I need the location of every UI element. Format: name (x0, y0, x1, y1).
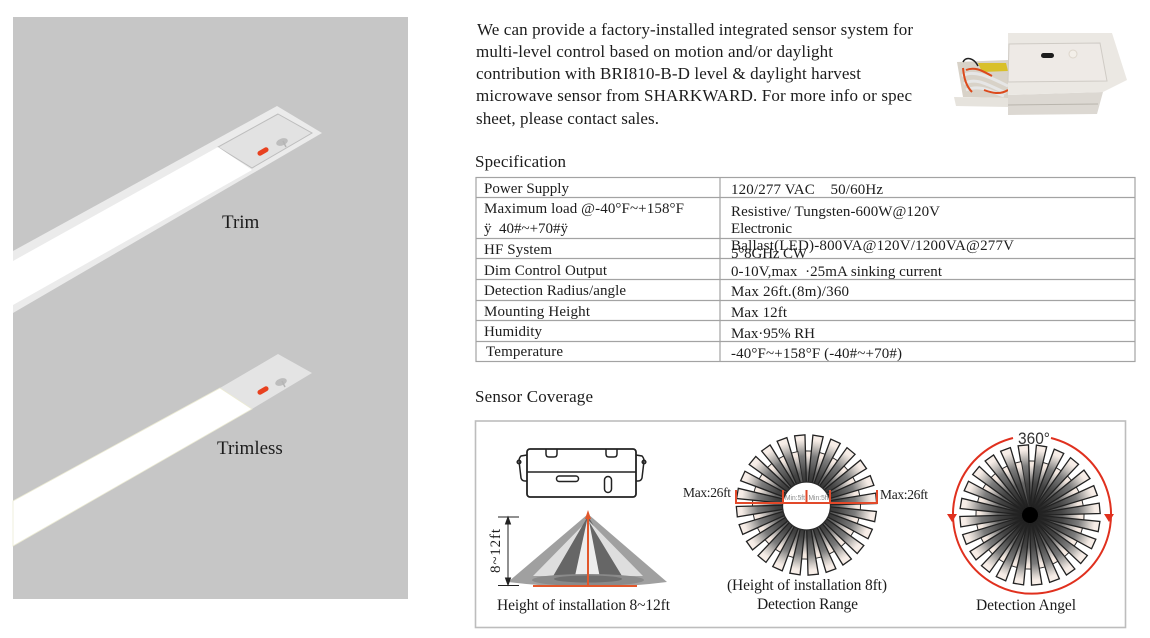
sensor product photo (954, 33, 1127, 115)
table values column: Electronic (731, 221, 792, 237)
chart: side cone coverage (488, 510, 667, 587)
intro paragraph: sheet, please contact sales. (476, 109, 659, 128)
caption: detection angel: Detection Angel (976, 597, 1076, 614)
table values column: Resistive/ Tungsten-600W@120V (731, 204, 940, 220)
table values column (731, 182, 1014, 362)
chart: detection angle fan (947, 429, 1114, 594)
height label: 8~12ft (488, 528, 504, 573)
table labels column: Power Supply (484, 181, 570, 197)
table labels column: HF System (484, 242, 552, 258)
max range labels: Max:26ft (683, 485, 731, 500)
specification heading: Specification (475, 152, 566, 171)
min range labels: Min:5ft (808, 493, 829, 502)
table labels column: Detection Radius/angle (484, 283, 626, 299)
table values column: 0-10V,max ·25mA sinking current (731, 264, 943, 280)
icon: sensor line drawing (517, 449, 646, 497)
table values column: -40°F~+158°F (-40#~+70#) (731, 346, 902, 362)
table values column: Ballast(LED)-800VA@120V/1200VA@277V (731, 238, 1014, 254)
table labels column: Humidity (484, 324, 542, 340)
red range markers (736, 490, 877, 503)
height dimension arrow (498, 517, 519, 586)
trim luminaire (13, 106, 322, 313)
table values column: Max 26ft.(8m)/360 (731, 284, 849, 300)
intro paragraph: contribution with BRI810-B-D level & daylight harvest (476, 64, 861, 83)
caption: detection range: Detection Range (757, 596, 858, 613)
intro paragraph: We can provide a factory-installed integrated sensor system for (477, 20, 913, 39)
intro paragraph: multi-level control based on motion and/or daylight (476, 42, 833, 61)
table values column: 5°8GHz CW (731, 246, 808, 262)
panel: product photos (13, 17, 408, 599)
caption: height of installation: Height of installation 8~12ft (497, 597, 671, 614)
min range labels (785, 493, 829, 502)
table labels column: Temperature (486, 344, 563, 360)
table values column: 120/277 VAC 50/60Hz (731, 182, 883, 198)
intro paragraph: microwave sensor from SHARKWARD. For more info or spec (476, 86, 912, 105)
intro paragraph (476, 20, 913, 128)
trimless label: Trimless (217, 438, 283, 459)
table values column: Max·95% RH (731, 326, 815, 342)
specification table (476, 178, 1135, 362)
sensor coverage heading: Sensor Coverage (475, 387, 593, 406)
table values column: Max 12ft (731, 305, 788, 321)
chart: detection range fan: Max:26ft (880, 487, 928, 502)
panel: sensor coverage (476, 421, 1126, 628)
table labels column: Maximum load @-40°F~+158°F (484, 201, 684, 217)
360 degree label: 360° (1018, 429, 1050, 448)
chart: detection range fan (683, 428, 928, 582)
table labels column: ÿ 40#~+70#ÿ (484, 221, 568, 237)
red 360 degree ring with arrows (953, 438, 1111, 594)
table labels column (484, 181, 684, 360)
caption: detection range: (Height of installation 8ft) (727, 577, 887, 594)
table labels column: Dim Control Output (484, 263, 608, 279)
table labels column: Mounting Height (484, 304, 591, 320)
caption: detection range (727, 577, 887, 613)
trim label: Trim (222, 212, 260, 233)
min range labels: Min:5ft (785, 493, 806, 502)
trimless luminaire (13, 354, 312, 546)
